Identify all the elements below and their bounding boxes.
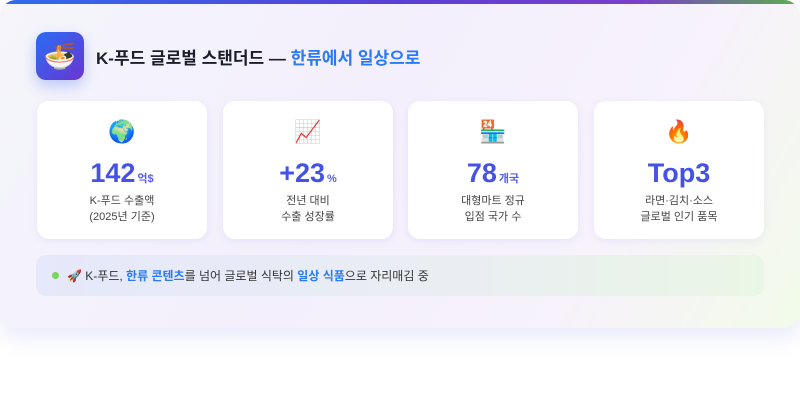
card: growth: +23%: [279, 158, 337, 188]
card: growth: 전년 대비: [286, 195, 330, 207]
card: export value: 142억$: [90, 158, 154, 188]
card: export value: 🌍: [108, 119, 136, 144]
callout banner: 한류 콘텐츠: [126, 269, 185, 283]
title: K-푸드 글로벌 스탠더드 — 한류에서 일상으로: [96, 49, 420, 68]
card: growth: [223, 101, 393, 239]
card: top items: 🔥: [665, 119, 693, 144]
card: export value: (2025년 기준): [89, 211, 155, 223]
icon: noodle bowl logo: 🍜: [44, 40, 76, 70]
card: countries: [408, 101, 578, 239]
card: top items: Top3: [648, 158, 710, 188]
card: export value: [37, 101, 207, 239]
card: top items: 글로벌 인기 품목: [641, 211, 717, 223]
icon: noodle bowl logo: [36, 32, 84, 80]
callout banner: [36, 255, 764, 296]
card: countries: 🏪: [479, 119, 507, 144]
card: countries: 대형마트 정규: [461, 195, 525, 207]
card: export value: K-푸드 수출액: [90, 195, 154, 207]
card: top items: 라면·김치·소스: [645, 195, 713, 207]
card: growth: 📈: [294, 119, 322, 144]
card: top items: [594, 101, 764, 239]
card: countries: 78개국: [467, 158, 519, 188]
card: growth: 수출 성장률: [281, 211, 335, 223]
callout banner: 🚀 K-푸드, 를 넘어 글로벌 식탁의 으로 자리매김 중: [67, 269, 429, 283]
callout banner: 일상 식품: [297, 269, 345, 283]
card: countries: 입점 국가 수: [465, 211, 521, 223]
